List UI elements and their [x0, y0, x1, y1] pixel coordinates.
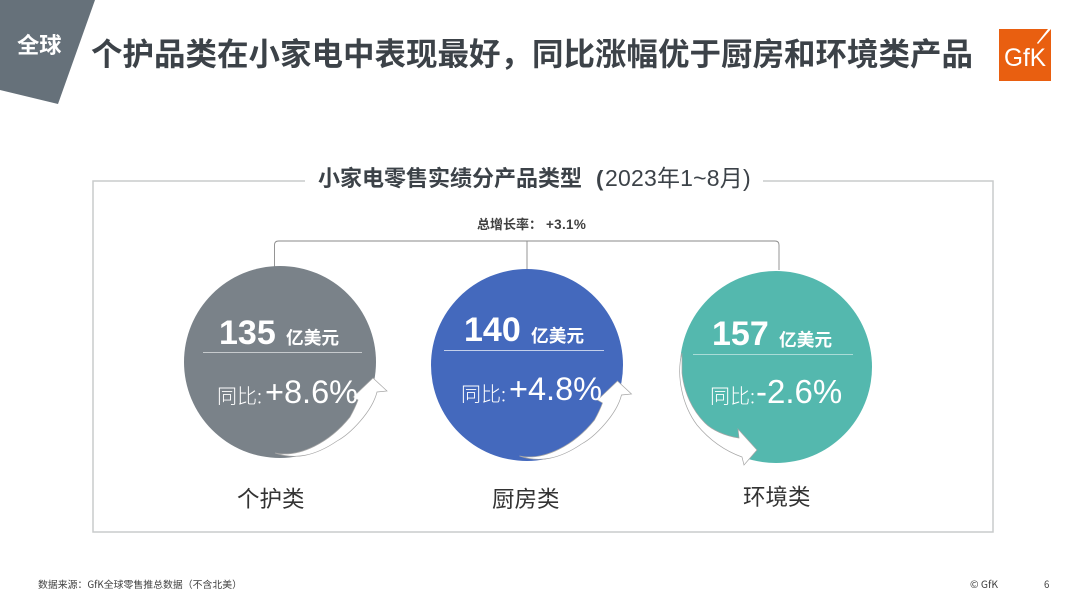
- value: personal care: 135: [219, 314, 276, 352]
- panel heading: 小家电零售实绩分产品类型: [318, 161, 582, 193]
- source note: 数据来源：GfK全球零售推总数据（不含北美）: [38, 577, 242, 591]
- label: kitchen: 厨房类: [492, 482, 560, 514]
- value: kitchen: 140: [464, 311, 521, 349]
- panel: personal care circle: +8.6%: [265, 374, 358, 410]
- icon: GfK logo: [999, 29, 1051, 81]
- total growth label: [477, 214, 586, 233]
- corner ribbon: region tag: 全球: [17, 28, 62, 60]
- unit: personal care: 亿美元: [286, 324, 339, 350]
- corner ribbon: region tag: [0, 0, 95, 104]
- icon: GfK logo: GfK: [1004, 44, 1046, 72]
- unit: kitchen: 亿美元: [531, 322, 584, 348]
- arrow: up personal care: [275, 378, 387, 456]
- copyright: © GfK: [970, 576, 998, 591]
- total growth label: +3.1%: [546, 217, 586, 232]
- panel heading: [318, 161, 751, 193]
- panel: chart frame: [93, 170, 993, 532]
- unit: environment: 亿美元: [779, 326, 832, 352]
- yoy: kitchen: 同比:: [461, 378, 506, 407]
- total growth label: 总增长率：: [477, 214, 542, 233]
- title: 个护品类在小家电中表现最好，同比涨幅优于厨房和环境类产品: [91, 29, 973, 75]
- panel: personal care circle: [184, 266, 387, 458]
- panel heading: (: [596, 166, 604, 191]
- yoy: personal care: 同比:: [217, 380, 262, 409]
- label: personal care: 个护类: [237, 482, 305, 514]
- panel: environment circle: [680, 271, 872, 465]
- value: environment: 157: [712, 315, 769, 353]
- panel: environment circle: -2.6%: [756, 373, 842, 410]
- yoy: environment: 同比:: [710, 380, 755, 409]
- arrow: up kitchen: [520, 381, 632, 459]
- label: environment: 环境类: [743, 480, 811, 512]
- panel: kitchen circle: [431, 269, 632, 461]
- page number: 6: [1044, 577, 1049, 591]
- panel: kitchen circle: +4.8%: [509, 371, 602, 407]
- bracket connector: [274, 241, 779, 270]
- arrow: down environment: [680, 353, 757, 465]
- panel heading: 2023年1~8月): [605, 165, 751, 191]
